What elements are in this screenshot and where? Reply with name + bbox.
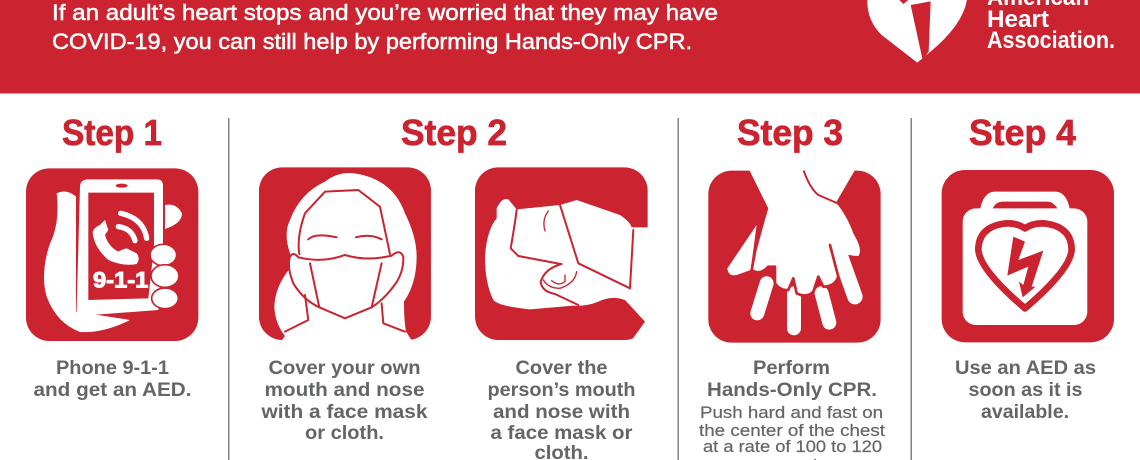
icon: hand holding phone dialing 9-1-1: 9-1-1 bbox=[93, 267, 148, 292]
text: step 2 right caption: person’s mouth bbox=[488, 379, 636, 401]
panel: step 1 bbox=[26, 112, 198, 401]
heading: step 1: Step 1 bbox=[62, 112, 162, 153]
icon: AED case with heart and lightning bolt bbox=[942, 170, 1114, 342]
text: step 4 caption bbox=[955, 357, 1096, 423]
icon: American Heart Association heart and torch logo bbox=[867, 0, 967, 63]
header text bbox=[52, 0, 718, 54]
text: step 2 left caption: mouth and nose bbox=[264, 379, 425, 401]
text: step 2 right caption: Cover the bbox=[516, 357, 608, 379]
icon: person wearing face mask bbox=[259, 167, 431, 343]
icon: hands performing chest compressions bbox=[708, 170, 881, 343]
text: step 3 caption: the center of the chest bbox=[699, 421, 885, 440]
icon: hand holding phone dialing 9-1-1 bbox=[26, 168, 198, 341]
header banner bbox=[0, 0, 1140, 94]
text: step 2 right caption bbox=[488, 357, 636, 460]
text: step 1 caption: and get an AED. bbox=[34, 379, 192, 401]
text: step 4 caption: Use an AED as bbox=[955, 357, 1096, 379]
logo wordmark: Association. bbox=[987, 27, 1115, 54]
text: step 3 caption: Hands-Only CPR. bbox=[707, 379, 877, 401]
text: step 2 right caption: and nose with bbox=[493, 401, 630, 423]
text: step 3 caption: at a rate of 100 to 120 bbox=[703, 437, 882, 456]
header text: COVID-19, you can still help by performing Hands-Only CPR. bbox=[52, 29, 692, 54]
panel: step 4 bbox=[942, 112, 1114, 423]
text: step 1 caption: Phone 9-1-1 bbox=[56, 357, 169, 379]
heading: step 2: Step 2 bbox=[401, 112, 507, 153]
text: step 2 left caption: or cloth. bbox=[305, 422, 384, 444]
text: step 3 caption: Perform bbox=[753, 357, 830, 379]
column dividers bbox=[228, 118, 912, 460]
heading: step 4: Step 4 bbox=[969, 112, 1076, 153]
heading: step 3: Step 3 bbox=[737, 112, 843, 153]
logo wordmark: Heart bbox=[987, 6, 1049, 33]
icon: covering person's mouth with cloth bbox=[475, 167, 650, 343]
text: step 3 caption bbox=[699, 357, 885, 460]
header text: If an adult’s heart stops and you’re worried that they may have bbox=[52, 0, 718, 25]
text: step 1 caption bbox=[34, 357, 192, 401]
logo wordmark bbox=[987, 0, 1115, 54]
text: step 2 left caption: Cover your own bbox=[268, 357, 420, 379]
panel: step 3 bbox=[699, 112, 885, 460]
text: step 2 right caption: a face mask or bbox=[490, 422, 633, 444]
text: step 3 caption: Push hard and fast on bbox=[700, 403, 883, 422]
panel: step 2 bbox=[259, 112, 650, 460]
text: step 4 caption: soon as it is bbox=[968, 379, 1083, 401]
text: step 2 left caption: with a face mask bbox=[260, 401, 428, 423]
text: step 2 left caption bbox=[260, 357, 428, 444]
text: step 4 caption: available. bbox=[981, 401, 1069, 423]
